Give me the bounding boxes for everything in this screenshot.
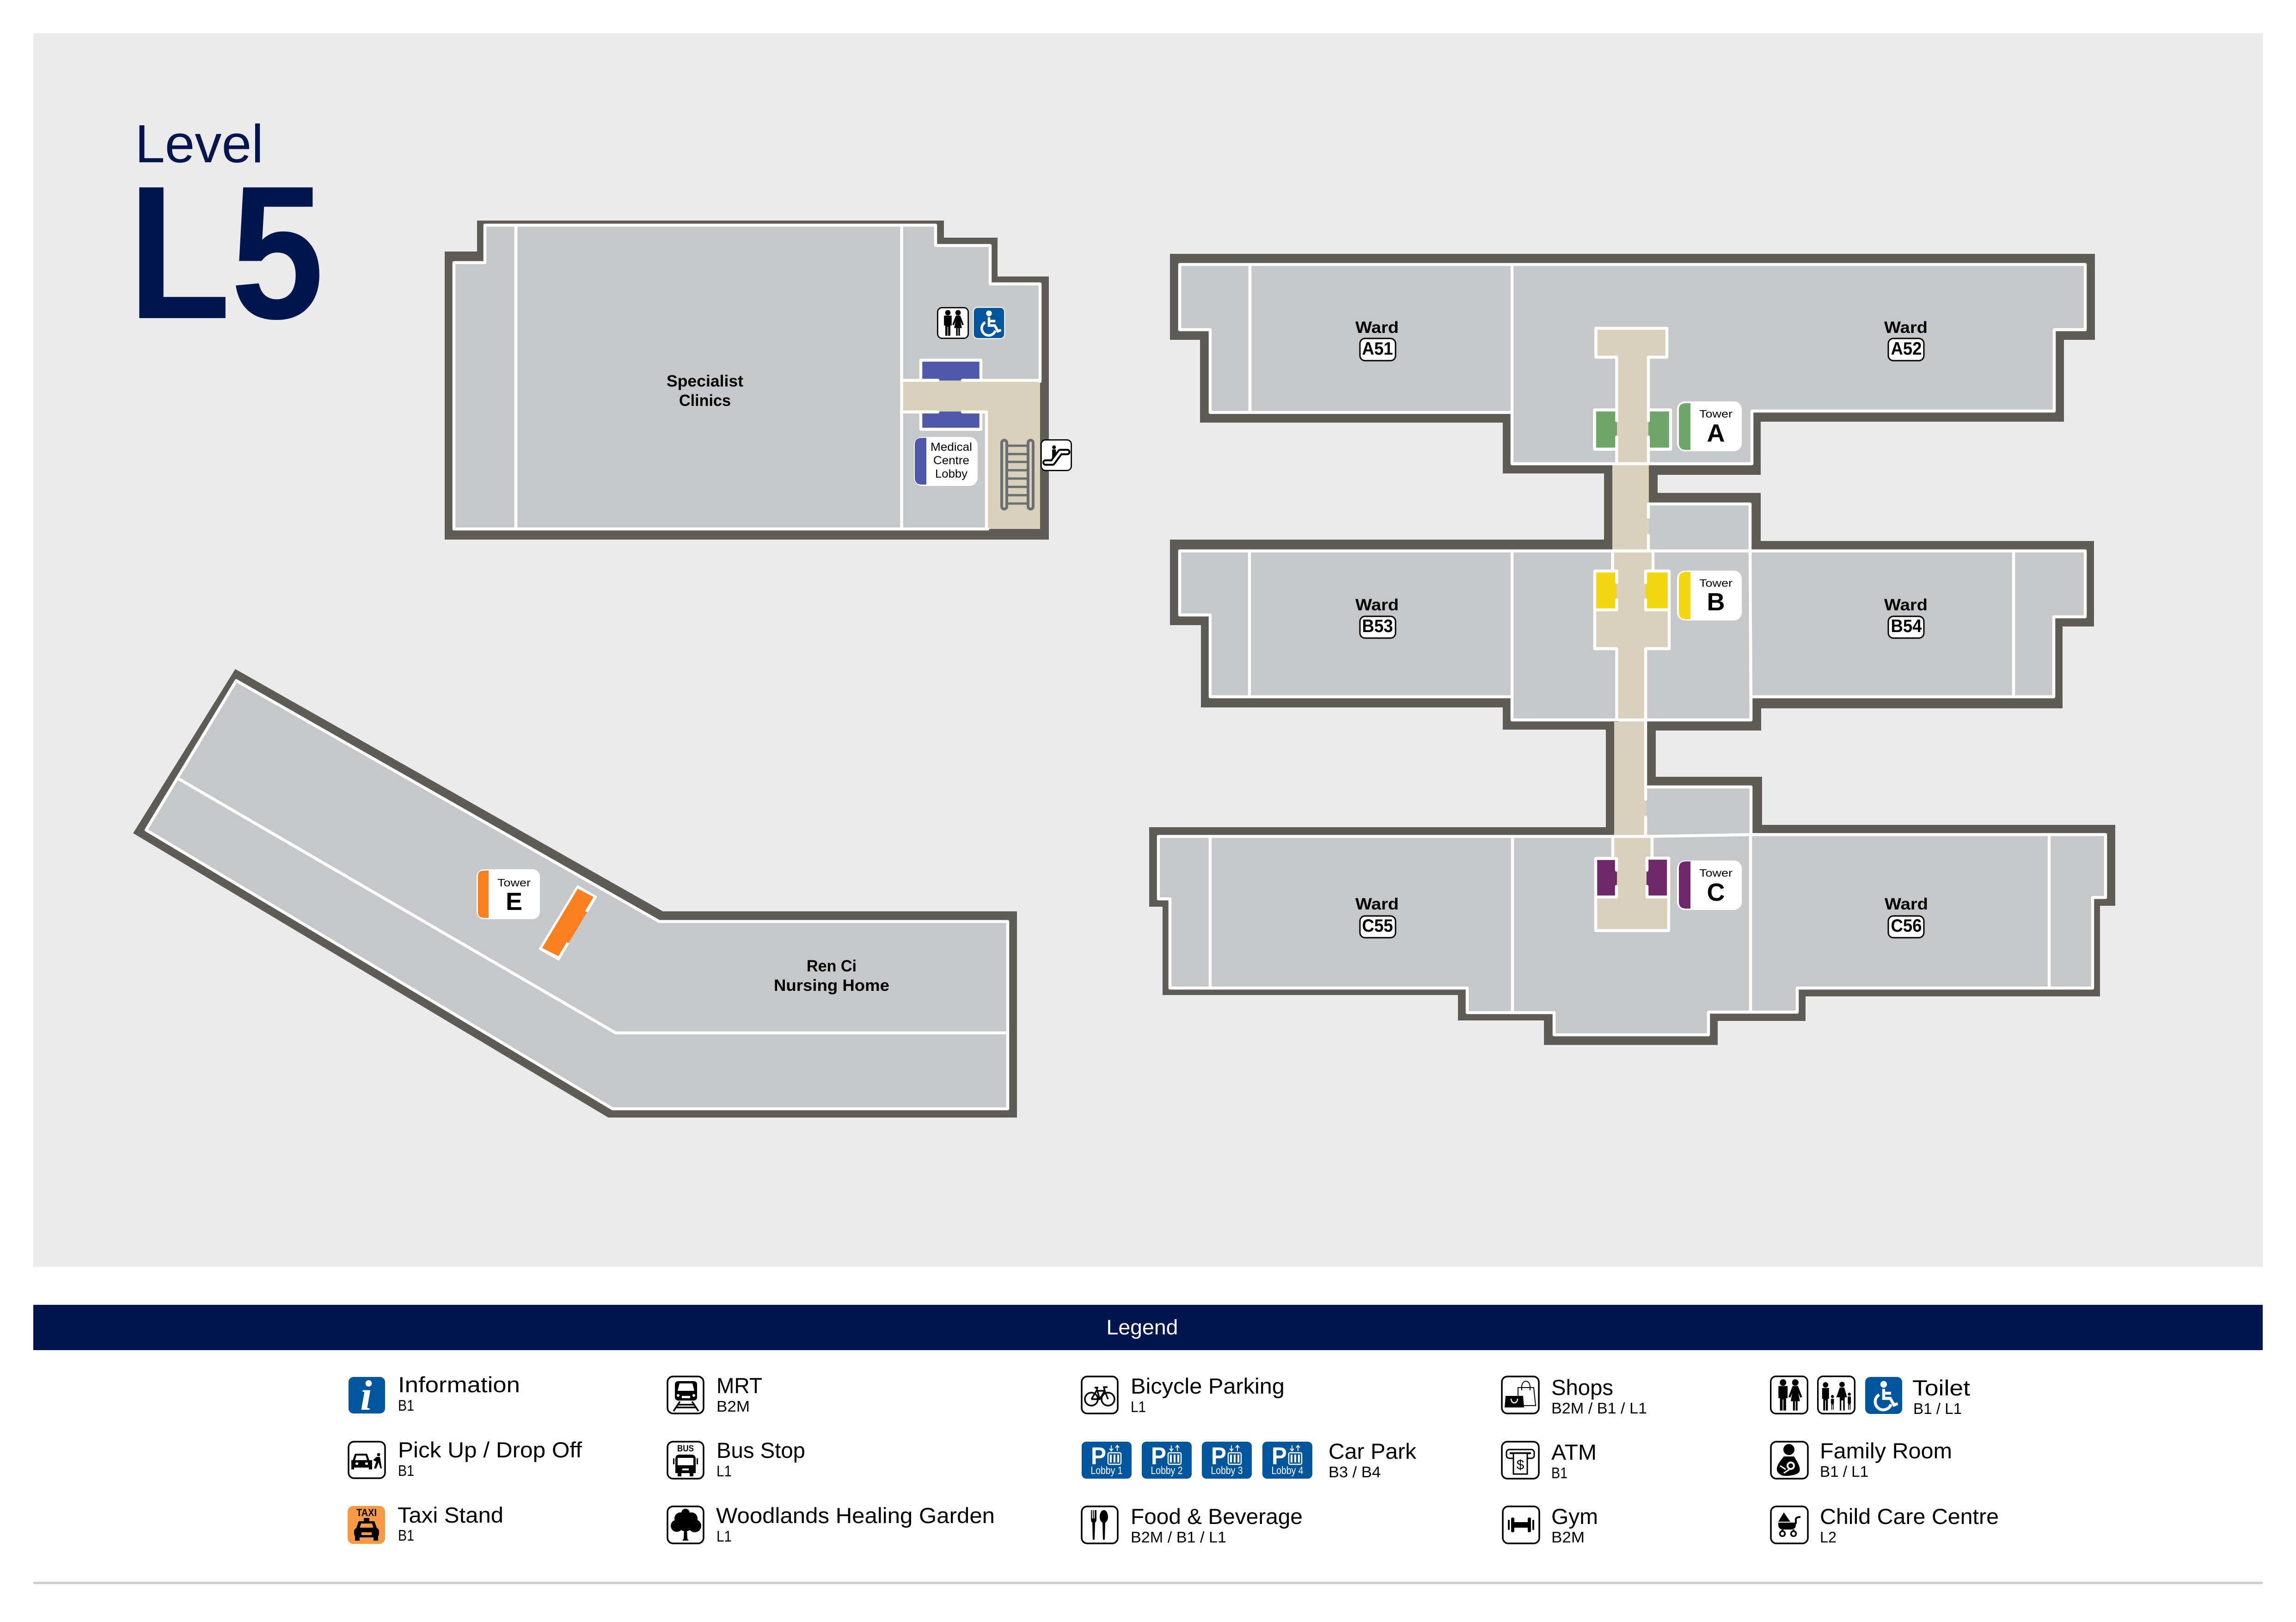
label: medical centre lobby: Medical bbox=[931, 441, 972, 454]
legend: gym: Gym bbox=[1551, 1504, 1598, 1529]
floor: tower B bbox=[1180, 504, 2085, 720]
label: ward B54 bbox=[1884, 596, 1928, 638]
legend: woodlands healing garden bbox=[667, 1503, 995, 1545]
label: tower A: Tower bbox=[1699, 408, 1733, 420]
label: ward C55: Ward bbox=[1355, 895, 1399, 913]
label: tower E: E bbox=[506, 888, 522, 915]
legend: bus stop: Bus Stop bbox=[716, 1438, 805, 1462]
legend: ATM: $ bbox=[1517, 1457, 1525, 1473]
legend: food and beverage: Food & Beverage bbox=[1131, 1504, 1303, 1529]
heading: ren ci nursing home bbox=[774, 957, 889, 995]
lift lobby: medical centre bbox=[922, 362, 980, 428]
legend: bus stop: BUS bbox=[677, 1444, 694, 1454]
corridor: door recess B and C bbox=[1616, 583, 1647, 886]
building: ren ci nursing home bbox=[133, 669, 1017, 1118]
label: ward A51: Ward bbox=[1355, 319, 1399, 337]
legend: woodlands healing garden: L1 bbox=[716, 1528, 732, 1545]
icon: family toilet bbox=[1818, 1376, 1855, 1413]
escalator steps bbox=[1002, 440, 1033, 509]
legend: family room bbox=[1771, 1438, 1952, 1480]
legend: shops: Shops bbox=[1551, 1375, 1613, 1400]
label: ward C56: Ward bbox=[1885, 895, 1928, 913]
icon: lobby 1: P bbox=[1091, 1443, 1106, 1470]
floor: tower A bbox=[1180, 264, 2085, 464]
label: tower C: C bbox=[1707, 879, 1725, 906]
building: specialist clinics block bbox=[445, 221, 1071, 540]
label: ward C55: C55 bbox=[1362, 916, 1393, 936]
legend: MRT: MRT bbox=[716, 1373, 762, 1398]
label: ward C56 bbox=[1885, 895, 1928, 938]
label: ward B53: B53 bbox=[1362, 616, 1393, 636]
floor: tower C bbox=[1158, 787, 2106, 1035]
legend: bus stop: L1 bbox=[716, 1462, 732, 1480]
legend: child care centre: Child Care Centre bbox=[1820, 1504, 1999, 1529]
icon: lobby 4: Lobby 4 bbox=[1271, 1464, 1304, 1476]
legend: MRT bbox=[667, 1373, 762, 1415]
label: ward A52: A52 bbox=[1891, 339, 1922, 359]
lift lobby: tower E bbox=[539, 885, 597, 961]
label: ward C55 bbox=[1355, 895, 1399, 938]
legend: pick up drop off: B1 bbox=[398, 1462, 414, 1479]
legend: bicycle parking bbox=[1082, 1374, 1285, 1415]
label: ward B53: Ward bbox=[1355, 596, 1399, 614]
legend: toilet bbox=[1771, 1376, 1970, 1417]
icon: lobby 3 bbox=[1202, 1442, 1252, 1479]
heading: specialist clinics bbox=[667, 372, 743, 410]
label: medical centre lobby: Centre bbox=[933, 454, 969, 467]
label: tower B: B bbox=[1707, 588, 1725, 616]
icon: lobby 1: Lobby 1 bbox=[1091, 1464, 1122, 1476]
legend: child care centre: L2 bbox=[1820, 1529, 1837, 1546]
label: tower E: Tower bbox=[497, 877, 531, 889]
label: ward A51: A51 bbox=[1362, 339, 1393, 359]
legend: bicycle parking: L1 bbox=[1131, 1398, 1146, 1415]
icon: toilet bbox=[1771, 1376, 1807, 1413]
icon: accessible toilet bbox=[974, 307, 1004, 338]
label: tower C: Tower bbox=[1699, 867, 1733, 879]
label: ward B54: B54 bbox=[1891, 616, 1922, 636]
corridor: medical centre bbox=[901, 380, 1040, 529]
title: Level L5: Level bbox=[135, 114, 263, 174]
legend: shops bbox=[1502, 1375, 1647, 1417]
legend: bicycle parking: Bicycle Parking bbox=[1131, 1374, 1285, 1398]
legend: food and beverage bbox=[1082, 1504, 1303, 1546]
legend: taxi stand bbox=[348, 1503, 503, 1544]
icon: lobby 1 bbox=[1082, 1442, 1132, 1479]
label: medical centre lobby bbox=[914, 437, 978, 486]
legend heading bar: Legend bbox=[1107, 1315, 1178, 1339]
icon: toilet bbox=[937, 307, 968, 338]
legend: shops: B2M / B1 / L1 bbox=[1551, 1400, 1647, 1417]
legend: family room: B1 / L1 bbox=[1820, 1463, 1868, 1480]
label: ward A52 bbox=[1884, 319, 1928, 361]
legend: toilet: Toilet bbox=[1912, 1376, 1970, 1400]
legend: woodlands healing garden: Woodlands Healing Garden bbox=[716, 1503, 995, 1528]
icon: lobby 3: P bbox=[1211, 1443, 1226, 1470]
icon: lobby 2: Lobby 2 bbox=[1151, 1464, 1182, 1476]
label: ward B53 bbox=[1355, 596, 1399, 638]
legend: ATM: B1 bbox=[1551, 1464, 1567, 1481]
heading: ren ci nursing home: Ren Ci bbox=[807, 957, 857, 975]
label: medical centre lobby: Lobby bbox=[935, 467, 968, 480]
legend heading bar bbox=[33, 1305, 2263, 1350]
legend: taxi stand: B1 bbox=[398, 1527, 414, 1544]
icon: lobby 4 bbox=[1262, 1442, 1312, 1479]
legend: taxi stand: Taxi Stand bbox=[398, 1503, 503, 1527]
legend: family room: Family Room bbox=[1820, 1438, 1952, 1463]
legend: information: i bbox=[360, 1372, 372, 1419]
heading: specialist clinics: Clinics bbox=[679, 392, 731, 410]
legend: gym bbox=[1503, 1504, 1598, 1546]
legend: food and beverage: B2M / B1 / L1 bbox=[1131, 1529, 1226, 1546]
legend: car park: B3 / B4 bbox=[1329, 1463, 1381, 1481]
lift lobby: tower A bbox=[1596, 412, 1669, 448]
building: towers A B C wards bbox=[1149, 254, 2115, 1045]
corridor: spine bbox=[1596, 330, 1668, 929]
legend: ATM: ATM bbox=[1551, 1440, 1597, 1464]
map background panel bbox=[33, 33, 2263, 1267]
legend: information: Information bbox=[398, 1372, 520, 1397]
icon: lobby 2: P bbox=[1151, 1443, 1166, 1470]
lift lobby: tower C bbox=[1597, 860, 1667, 896]
label: tower B bbox=[1677, 571, 1742, 621]
legend: child care centre bbox=[1771, 1504, 1999, 1546]
label: ward C56: C56 bbox=[1891, 916, 1922, 936]
legend: toilet: B1 / L1 bbox=[1913, 1400, 1962, 1417]
legend: taxi stand: TAXI bbox=[356, 1507, 377, 1518]
label: ward B54: Ward bbox=[1884, 596, 1928, 614]
icon: escalator bbox=[1041, 440, 1071, 471]
icon: accessible toilet bbox=[1865, 1377, 1902, 1414]
legend: car park bbox=[1082, 1439, 1417, 1481]
legend: gym: B2M bbox=[1551, 1529, 1585, 1546]
icon: lobby 2 bbox=[1142, 1442, 1192, 1479]
legend: car park: Car Park bbox=[1329, 1439, 1417, 1463]
label: tower A bbox=[1677, 401, 1742, 451]
icon: lobby 3: Lobby 3 bbox=[1211, 1464, 1243, 1476]
legend: information: B1 bbox=[398, 1397, 414, 1414]
legend: information bbox=[349, 1372, 520, 1419]
heading: ren ci nursing home: Nursing Home bbox=[774, 977, 889, 995]
label: ward A52: Ward bbox=[1884, 319, 1928, 337]
label: tower B: Tower bbox=[1699, 577, 1733, 589]
legend: bus stop bbox=[667, 1438, 805, 1480]
legend: pick up drop off: Pick Up / Drop Off bbox=[398, 1438, 582, 1462]
legend: pick up drop off bbox=[349, 1438, 582, 1479]
label: tower A: A bbox=[1707, 419, 1725, 447]
legend: ATM bbox=[1502, 1440, 1597, 1481]
label: tower E bbox=[477, 869, 540, 919]
label: ward A51 bbox=[1355, 319, 1399, 361]
title: Level L5: L5 bbox=[128, 147, 324, 359]
label: tower C bbox=[1677, 860, 1742, 910]
heading: specialist clinics: Specialist bbox=[667, 372, 743, 390]
lift lobby: tower B bbox=[1596, 572, 1668, 608]
legend: MRT: B2M bbox=[716, 1398, 750, 1415]
icon: lobby 4: P bbox=[1272, 1443, 1287, 1470]
